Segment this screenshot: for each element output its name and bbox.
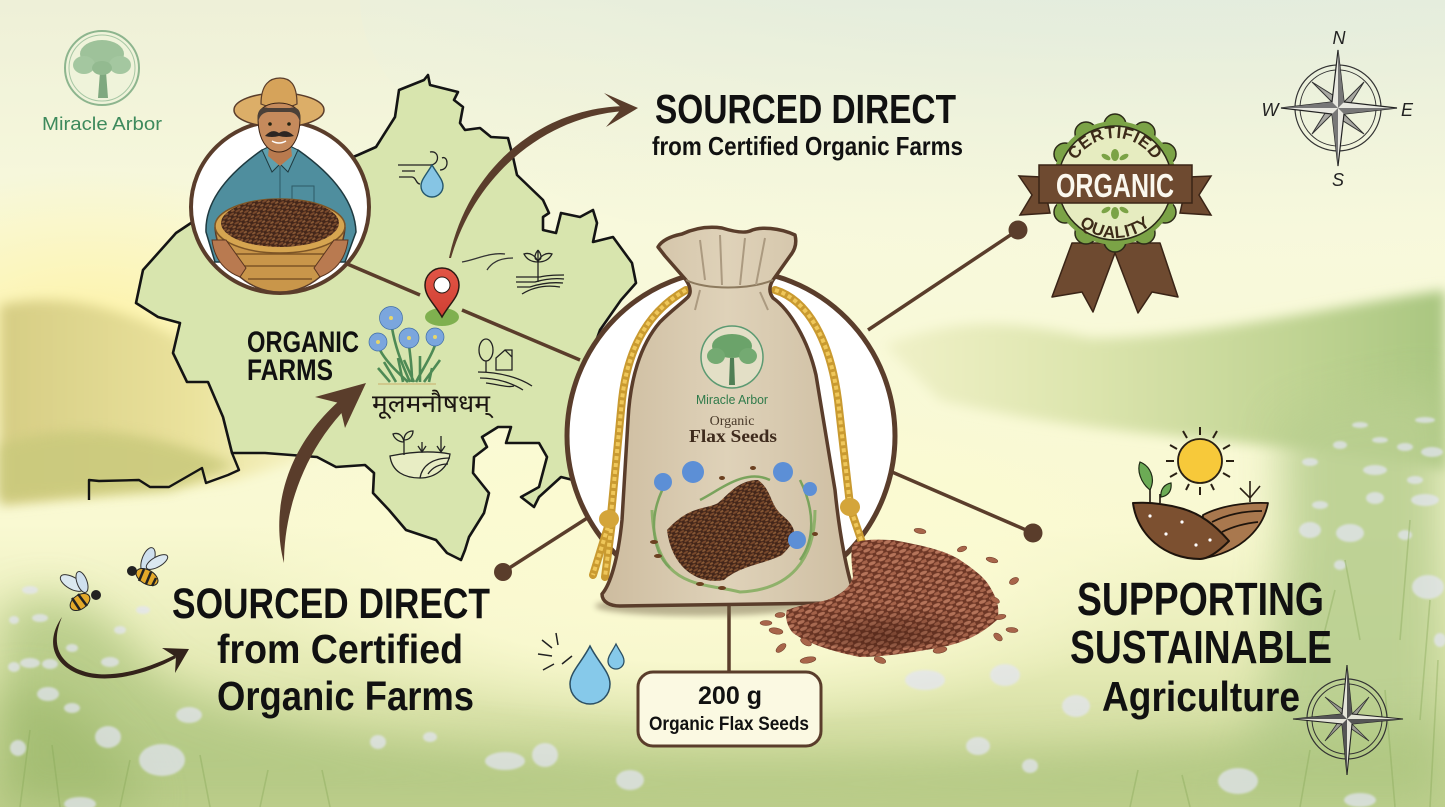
scalloped seal <box>1046 114 1184 252</box>
sanskrit label: मूलमनौषधम् <box>372 389 494 419</box>
icon: soil and seedlings <box>390 431 450 478</box>
organic certification badge <box>1018 113 1212 314</box>
basket of seeds <box>212 199 348 292</box>
heading: supporting sustainable agriculture <box>1070 573 1332 720</box>
face <box>258 103 300 166</box>
shirt <box>206 150 356 262</box>
map label: organic farms: FARMS <box>247 354 333 387</box>
heading: sourced direct (top): SOURCED DIRECT <box>655 86 956 132</box>
heading: sourced direct (top) <box>652 86 963 161</box>
weight label: 200 g <box>638 672 821 746</box>
location pin <box>425 268 459 326</box>
organic certification badge: CERTIFIED <box>1068 126 1161 158</box>
product circle <box>567 270 895 602</box>
logo: Miracle Arbor <box>42 31 162 134</box>
seed pile <box>760 527 1020 665</box>
flower wreath with seed window <box>650 461 818 592</box>
curved arrow to map <box>279 383 366 563</box>
heading: sourced direct (top): from Certified Organic Farms <box>652 131 963 161</box>
bee left <box>58 570 101 614</box>
linen pouch: Flax Seeds: Flax Seeds <box>689 426 777 446</box>
organic certification badge: QUALITY <box>1082 216 1147 238</box>
rope right <box>775 290 868 560</box>
connector lines and dots around bag <box>494 220 1042 672</box>
icon: flax flowers <box>369 306 444 384</box>
compass rose: top right: S <box>1332 170 1344 190</box>
farmer portrait <box>191 78 369 293</box>
rope left <box>593 290 686 577</box>
ribbon tails <box>1052 243 1178 313</box>
organic certification badge: ORGANIC <box>1056 167 1174 204</box>
compass rose: top right: W <box>1262 100 1280 120</box>
bees <box>58 546 170 614</box>
compass rose: top right <box>1262 28 1414 190</box>
icon: water drops <box>538 633 624 704</box>
icon: sun and soil bowl <box>1133 427 1268 559</box>
curved arrow from bees <box>53 617 189 678</box>
heading: supporting sustainable agriculture: SUPPORTING <box>1077 573 1324 625</box>
heading: sourced direct (lower) <box>172 580 490 719</box>
hat <box>234 78 324 127</box>
icon: farmhouse <box>478 339 532 390</box>
icon: birds <box>462 254 513 270</box>
curved arrow to top heading <box>449 93 638 258</box>
heading: supporting sustainable agriculture: Agriculture <box>1102 673 1300 720</box>
heading: sourced direct (lower): SOURCED DIRECT <box>172 580 490 628</box>
weight label: 200 g: 200 g <box>698 682 762 710</box>
connector lines: farmer to pin to bag <box>345 263 580 360</box>
map label: organic farms <box>247 326 359 387</box>
icon: sprout and furrows <box>516 250 564 294</box>
weight label: 200 g: Organic Flax Seeds <box>649 714 809 735</box>
linen pouch: Flax Seeds <box>593 227 868 616</box>
compass rose: bottom right <box>1293 665 1403 775</box>
icon: wind and water drop <box>398 152 447 197</box>
compass rose: top right: E <box>1401 100 1414 120</box>
logo: Miracle Arbor: Miracle Arbor <box>42 114 162 134</box>
linen pouch: Flax Seeds: Miracle Arbor <box>696 393 768 407</box>
map label: organic farms: ORGANIC <box>247 326 359 359</box>
map of the sourcing region <box>89 75 636 560</box>
heading: sourced direct (lower): Organic Farms <box>217 673 474 719</box>
heading: supporting sustainable agriculture: SUSTAINABLE <box>1070 621 1332 673</box>
bee right <box>127 546 170 589</box>
compass rose: top right: N <box>1332 28 1346 48</box>
heading: sourced direct (lower): from Certified <box>217 626 463 672</box>
linen pouch: Flax Seeds: Organic <box>710 414 754 429</box>
bag logo <box>701 326 763 388</box>
